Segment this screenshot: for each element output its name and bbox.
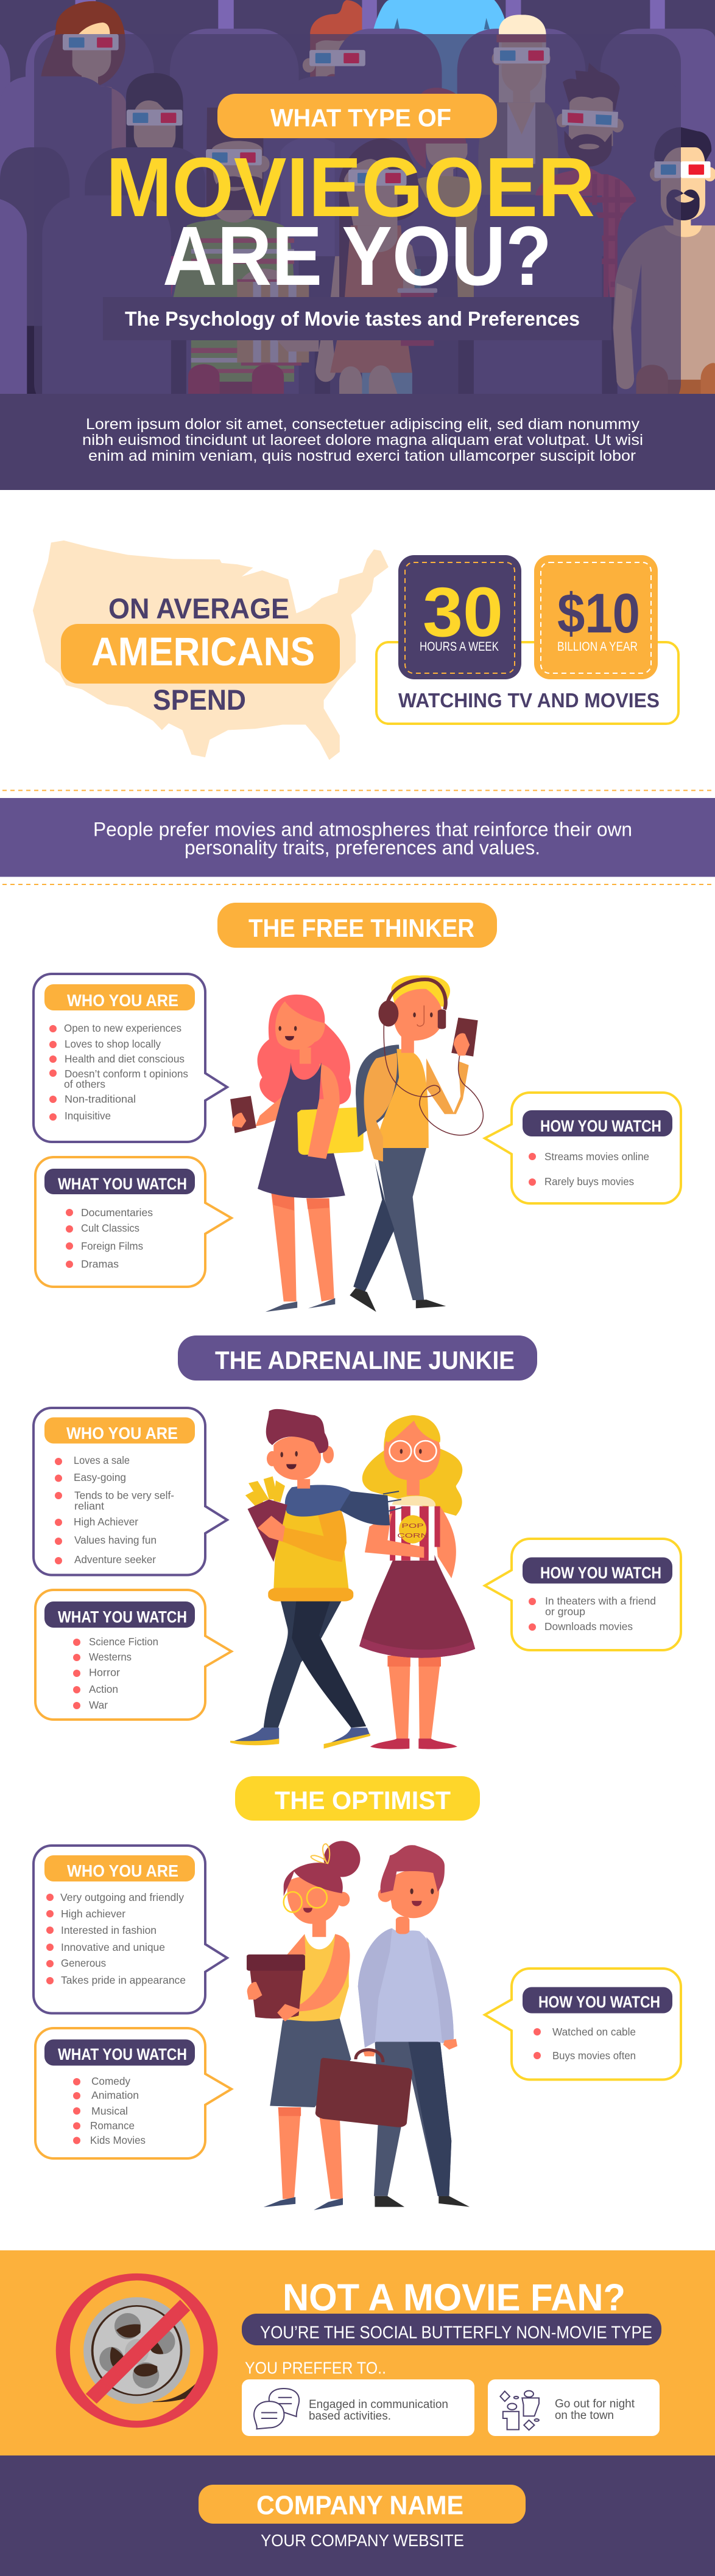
bullet list: Romance	[90, 2119, 135, 2132]
bullet list	[534, 2026, 636, 2062]
panel: optimist how you watch: HOW YOU WATCH	[538, 1993, 660, 2011]
footer	[0, 2455, 715, 2576]
bullet list	[55, 1454, 174, 1566]
popcorn label: POP	[401, 1522, 424, 1530]
pill: company name	[199, 2485, 526, 2524]
card: night out: on the town	[555, 2409, 614, 2422]
boy with fries	[230, 1409, 402, 1749]
man with briefcase	[315, 1845, 470, 2207]
card: communication	[242, 2379, 474, 2436]
panel: adrenaline who you are	[33, 1408, 227, 1575]
card: communication: Engaged in communication	[309, 2398, 448, 2411]
bullet list: Comedy	[91, 2075, 130, 2087]
panel: americans spend stats	[33, 541, 678, 760]
bullet list: Very outgoing and friendly	[60, 1891, 184, 1903]
pill: company name: COMPANY NAME	[256, 2491, 463, 2520]
girl with phone	[230, 995, 364, 1312]
panel: optimist what you watch	[35, 2028, 231, 2158]
bullet list: Foreign Films	[81, 1240, 143, 1252]
card: night out: Go out for night	[555, 2398, 635, 2410]
bullet list: In theaters with a friend	[545, 1595, 656, 1607]
bullet list: Doesn’t conform t opinions	[65, 1068, 188, 1080]
text: spend: SPEND	[153, 684, 246, 716]
panel: optimist what you watch: WHAT YOU WATCH	[58, 2045, 187, 2063]
panel: adrenaline what you watch: WHAT YOU WATCH	[58, 1608, 187, 1626]
bullet list: Tends to be very self-	[74, 1489, 174, 1501]
purple statement band: personality traits, preferences and values.	[185, 836, 540, 858]
title pill: what type of: WHAT TYPE OF	[270, 103, 451, 131]
outlined box: watching tv and movies	[376, 642, 678, 724]
panel: optimist how you watch	[485, 1969, 681, 2080]
icon: chat bubbles	[254, 2389, 299, 2429]
scene left half	[0, 0, 456, 394]
intro band: Lorem ipsum dolor sit amet, consectetuer adipiscing elit, sed diam nonummy	[86, 416, 640, 433]
bullet list	[46, 1891, 186, 1986]
stat card: 30 hours: HOURS A WEEK	[420, 640, 499, 654]
bullet list: High achiever	[61, 1908, 125, 1920]
bullet list: Inquisitive	[65, 1110, 111, 1122]
illustration: free thinker couple	[230, 975, 483, 1312]
panel: adrenaline how you watch	[485, 1539, 681, 1650]
bullet list: Generous	[61, 1957, 106, 1969]
bullet list: Buys movies often	[552, 2049, 636, 2062]
bullet list	[73, 1636, 158, 1711]
bullet list: Watched on cable	[552, 2026, 636, 2038]
bullet list: Dramas	[81, 1258, 119, 1270]
section heading: the adrenaline junkie: THE ADRENALINE JUNKIE	[215, 1346, 515, 1374]
section heading: the free thinker	[217, 903, 497, 948]
subtitle band	[103, 297, 611, 340]
bullet list	[73, 2075, 146, 2146]
panel: adrenaline what you watch	[35, 1590, 231, 1720]
illustration: adrenaline couple	[230, 1409, 475, 1749]
panel: free thinker what you watch	[35, 1157, 231, 1287]
intro band	[0, 394, 715, 490]
purple statement band: People prefer movies and atmospheres that reinforce their own	[93, 818, 632, 840]
bullet list: Adventure seeker	[74, 1553, 156, 1566]
bullet list: Westerns	[89, 1651, 132, 1663]
pill: americans: AMERICANS	[91, 629, 315, 674]
panel: free thinker what you watch: WHAT YOU WATCH	[58, 1175, 187, 1193]
bullet list: Loves to shop locally	[65, 1038, 161, 1050]
section heading: the free thinker: THE FREE THINKER	[248, 914, 474, 942]
tinted overlay	[34, 34, 681, 411]
bullet list: War	[89, 1699, 108, 1711]
panel: adrenaline how you watch: HOW YOU WATCH	[540, 1564, 661, 1582]
title: moviegoer: MOVIEGOER	[106, 141, 595, 234]
bullet list: Rarely buys movies	[544, 1175, 634, 1188]
bullet list: Action	[89, 1683, 118, 1695]
text: on average: ON AVERAGE	[108, 592, 289, 625]
panel: not a movie fan	[0, 2250, 715, 2455]
bullet list: Downloads movies	[544, 1620, 633, 1633]
panel: optimist who you are	[33, 1846, 227, 2014]
bullet list: Streams movies online	[544, 1150, 649, 1163]
woman with box	[247, 1841, 360, 2210]
bullet list	[49, 1022, 188, 1122]
pill: americans	[61, 624, 340, 684]
section heading: the optimist: THE OPTIMIST	[275, 1786, 451, 1815]
bullet list: Animation	[91, 2089, 139, 2101]
bullet list: Non-traditional	[65, 1093, 136, 1105]
purple statement band	[0, 798, 715, 877]
scene right half	[330, 0, 715, 394]
popcorn label	[397, 1515, 428, 1544]
bullet list: of others	[64, 1078, 105, 1090]
stat card: 30 hours: 30	[423, 573, 503, 651]
panel: free thinker who you are: WHO YOU ARE	[67, 991, 178, 1010]
bullet list	[529, 1150, 649, 1188]
pill: social butterfly	[242, 2314, 661, 2345]
panel: free thinker how you watch: HOW YOU WATCH	[540, 1117, 661, 1135]
bullet list: Takes pride in appearance	[61, 1974, 186, 1986]
text: company website: YOUR COMPANY WEBSITE	[261, 2531, 464, 2550]
pill: social butterfly: YOU’RE THE SOCIAL BUTTERFLY NON-MOVIE TYPE	[260, 2323, 652, 2342]
panel: free thinker who you are	[33, 974, 227, 1142]
heading: not a movie fan: NOT A MOVIE FAN?	[283, 2277, 625, 2319]
outlined box: watching tv and movies: WATCHING TV AND MOVIES	[398, 689, 660, 712]
subtitle band: The Psychology of Movie tastes and Preferences	[125, 307, 580, 330]
bullet list: Open to new experiences	[64, 1022, 181, 1034]
intro band: nibh euismod tincidunt ut laoreet dolore magna aliquam erat volutpat. Ut wisi	[82, 432, 643, 449]
intro band: enim ad minim veniam, quis nostrud exerci tation ullamcorper suscipit lobor	[88, 447, 636, 464]
bullet list	[529, 1595, 656, 1633]
bullet list: Innovative and unique	[61, 1941, 165, 1953]
bullet list: Horror	[89, 1667, 120, 1679]
section heading: the adrenaline junkie	[178, 1335, 537, 1381]
panel: free thinker how you watch	[485, 1093, 681, 1203]
panel: hero illustration of cinema audience	[0, 0, 715, 411]
bullet list: Health and diet conscious	[65, 1053, 185, 1065]
bullet list: Cult Classics	[81, 1222, 139, 1234]
panel: adrenaline who you are: WHO YOU ARE	[66, 1424, 178, 1443]
bullet list: High Achiever	[74, 1516, 138, 1528]
boy with headphones	[350, 975, 483, 1312]
popcorn label: CORN	[397, 1532, 428, 1539]
bullet list: Kids Movies	[90, 2134, 146, 2146]
stat card: 10 billion	[534, 555, 658, 679]
bullet list: reliant	[74, 1500, 104, 1512]
bullet list: or group	[545, 1606, 585, 1618]
panel: optimist who you are: WHO YOU ARE	[67, 1861, 178, 1880]
bullet list: Easy-going	[74, 1471, 126, 1483]
bullet list: Documentaries	[81, 1206, 153, 1219]
text: you preffer to: YOU PREFFER TO..	[245, 2358, 386, 2378]
stat card: 30 hours	[398, 555, 521, 679]
bullet list: Loves a sale	[74, 1454, 130, 1466]
illustration: optimist couple	[247, 1841, 470, 2210]
stat card: 10 billion: $10	[557, 583, 640, 645]
bullet list: Musical	[91, 2105, 128, 2117]
card: night out	[488, 2379, 660, 2436]
bullet list	[66, 1206, 153, 1270]
bullet list: Interested in fashion	[61, 1924, 157, 1936]
section heading: the optimist	[235, 1776, 480, 1821]
icon: film reel with prohibition sign	[63, 2277, 211, 2424]
card: communication: based activities.	[309, 2410, 391, 2423]
title: are you: ARE YOU?	[163, 209, 552, 303]
bullet list: Values having fun	[74, 1534, 157, 1546]
3D glasses	[63, 34, 365, 165]
girl with popcorn	[359, 1415, 475, 1749]
icon: dancers	[500, 2391, 539, 2430]
title pill: what type of	[217, 94, 497, 138]
bullet list: Science Fiction	[89, 1636, 158, 1648]
stat card: 10 billion: BILLION A YEAR	[557, 640, 638, 654]
map of the usa	[33, 541, 389, 760]
